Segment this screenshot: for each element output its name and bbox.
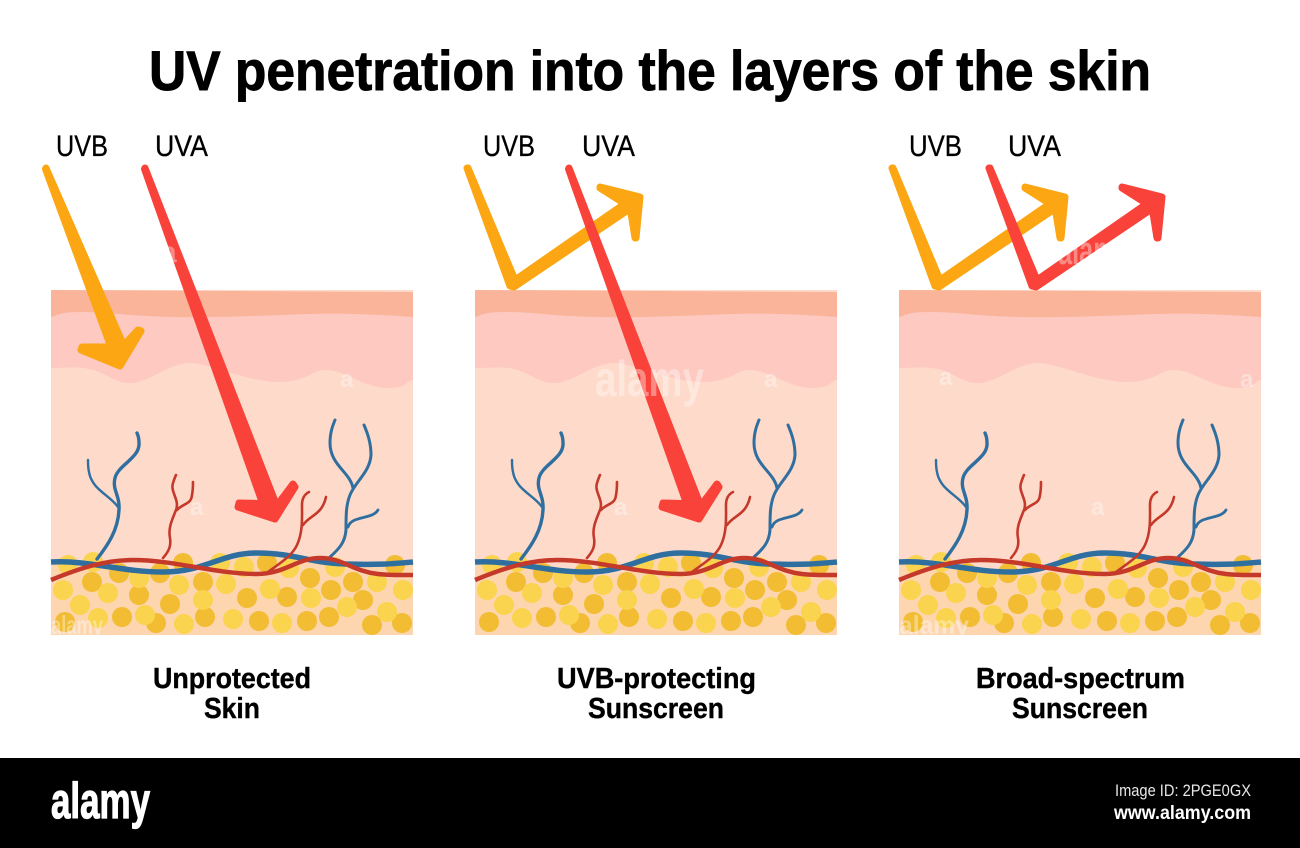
label: UVA: UVA [582, 130, 635, 163]
label: UVA: UVA [155, 130, 208, 163]
label: UVA: UVA [1008, 130, 1061, 163]
website: www.alamy.com [1113, 803, 1251, 824]
watermark: a [1091, 494, 1105, 521]
image id: Image ID: 2PGE0GX [1115, 781, 1251, 800]
arrow: UVA reaches the dermis [568, 168, 719, 519]
watermark: alamy [595, 351, 704, 407]
watermark: a [340, 366, 354, 393]
watermark: a [939, 364, 953, 391]
label: UVB: UVB [483, 130, 535, 163]
label: UVB: UVB [56, 130, 108, 163]
skin cross-section [899, 290, 1261, 635]
watermark [51, 229, 1254, 640]
arrow: UVA reflected [989, 168, 1162, 287]
skin cross-section [475, 290, 837, 635]
watermark: a [1240, 366, 1254, 393]
footer logo: alamy [51, 773, 150, 829]
caption: Unprotected [153, 663, 311, 695]
watermark: a [160, 236, 177, 269]
watermark: alamy [51, 610, 103, 640]
caption: Sunscreen [1012, 693, 1148, 725]
watermark: alamy [899, 610, 970, 640]
caption: Sunscreen [588, 693, 724, 725]
label: UVB: UVB [909, 130, 962, 163]
caption: UVB-protecting [557, 663, 756, 695]
watermark: a [190, 494, 204, 521]
caption: Broad-spectrum [976, 663, 1185, 695]
title: UV penetration into the layers of the skin [149, 39, 1151, 102]
caption: Skin [204, 693, 260, 725]
skin cross-section [51, 290, 413, 635]
watermark: a [764, 366, 778, 393]
watermark: a [614, 494, 628, 521]
footer bar [0, 758, 1300, 848]
watermark: alamy [1058, 229, 1130, 273]
arrow: UVB reflected [892, 168, 1065, 287]
panel: unprotected skin [46, 130, 413, 725]
arrow: UVA reaches the dermis [144, 168, 295, 519]
panel: UVB-protecting sunscreen [467, 130, 837, 725]
arrow: UVB reflected [467, 168, 640, 287]
panel: broad-spectrum sunscreen [892, 130, 1261, 725]
arrow: UVB stops in the epidermis [46, 168, 141, 366]
